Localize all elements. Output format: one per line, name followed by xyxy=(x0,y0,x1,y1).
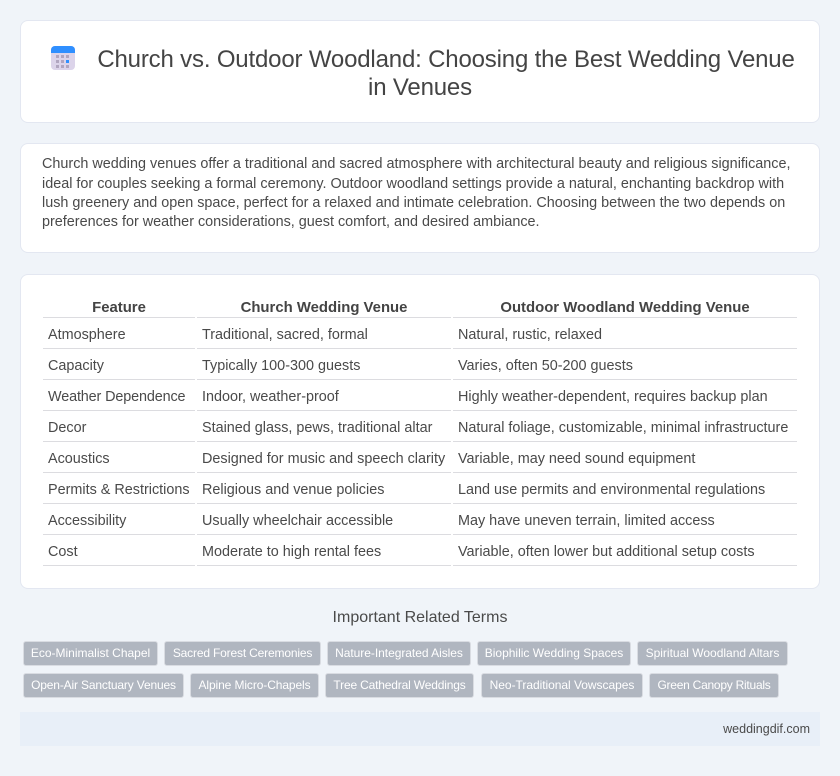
intro text: Church wedding venues offer a traditional and sacred atmosphere with architectural beauty and religious significance, xyxy=(42,156,790,172)
related term tags: Biophilic Wedding Spaces xyxy=(485,646,623,660)
intro text: lush greenery and open space, perfect for a relaxed and intimate celebration. Choosing between the two depends on xyxy=(42,195,785,211)
related term tags: Eco-Minimalist Chapel xyxy=(31,646,150,660)
comparison table: Variable, often lower but additional setup costs xyxy=(458,544,755,560)
comparison table: Traditional, sacred, formal xyxy=(202,327,368,343)
comparison table: Designed for music and speech clarity xyxy=(202,451,445,467)
related term tags: Green Canopy Rituals xyxy=(657,678,771,692)
comparison table: Acoustics xyxy=(48,451,110,467)
icon: calendar xyxy=(51,46,75,70)
comparison table: Natural foliage, customizable, minimal infrastructure xyxy=(458,420,788,436)
title: Church vs. Outdoor Woodland: Choosing the Best Wedding Venue xyxy=(97,46,795,73)
title: in Venues xyxy=(368,74,472,101)
related term tags: Tree Cathedral Weddings xyxy=(333,678,466,692)
intro text xyxy=(42,156,790,230)
intro text: preferences for weather considerations, guest comfort, and desired ambiance. xyxy=(42,214,540,230)
footer bar xyxy=(20,712,820,746)
related term tags: Neo-Traditional Vowscapes xyxy=(490,678,634,692)
comparison table: Permits & Restrictions xyxy=(48,482,190,498)
comparison table: Highly weather-dependent, requires backup plan xyxy=(458,389,768,405)
comparison table: Moderate to high rental fees xyxy=(202,544,381,560)
comparison table: Typically 100-300 guests xyxy=(202,358,360,374)
comparison table: Capacity xyxy=(48,358,104,374)
comparison table: Land use permits and environmental regulations xyxy=(458,482,765,498)
comparison table: Religious and venue policies xyxy=(202,482,384,498)
comparison table: Weather Dependence xyxy=(48,389,185,405)
related terms heading: Important Related Terms xyxy=(333,609,507,626)
comparison table: Stained glass, pews, traditional altar xyxy=(202,420,432,436)
comparison table: Feature xyxy=(92,300,146,316)
intro panel xyxy=(20,143,820,253)
related term tags: Open-Air Sanctuary Venues xyxy=(31,678,176,692)
related term tags: Alpine Micro-Chapels xyxy=(198,678,311,692)
comparison table: Accessibility xyxy=(48,513,126,529)
related term tags: Spiritual Woodland Altars xyxy=(646,646,779,660)
comparison table: Atmosphere xyxy=(48,327,126,343)
intro text: ideal for couples seeking a formal ceremony. Outdoor woodland settings provide a natural, enchanting backdrop with xyxy=(42,176,784,192)
related term tags xyxy=(23,641,788,698)
comparison table: Natural, rustic, relaxed xyxy=(458,327,602,343)
footer site name: weddingdif.com xyxy=(723,722,810,736)
header panel xyxy=(20,20,820,123)
comparison table xyxy=(43,300,797,566)
comparison table: Varies, often 50-200 guests xyxy=(458,358,633,374)
table panel xyxy=(20,274,820,589)
related term tags: Nature-Integrated Aisles xyxy=(335,646,463,660)
related term tags: Sacred Forest Ceremonies xyxy=(173,646,312,660)
comparison table: Decor xyxy=(48,420,86,436)
comparison table: Indoor, weather-proof xyxy=(202,389,339,405)
comparison table: Usually wheelchair accessible xyxy=(202,513,393,529)
comparison table: Cost xyxy=(48,544,78,560)
comparison table: Variable, may need sound equipment xyxy=(458,451,695,467)
comparison table: Church Wedding Venue xyxy=(241,300,407,316)
comparison table: May have uneven terrain, limited access xyxy=(458,513,715,529)
title xyxy=(97,46,795,101)
comparison table: Outdoor Woodland Wedding Venue xyxy=(500,300,750,316)
